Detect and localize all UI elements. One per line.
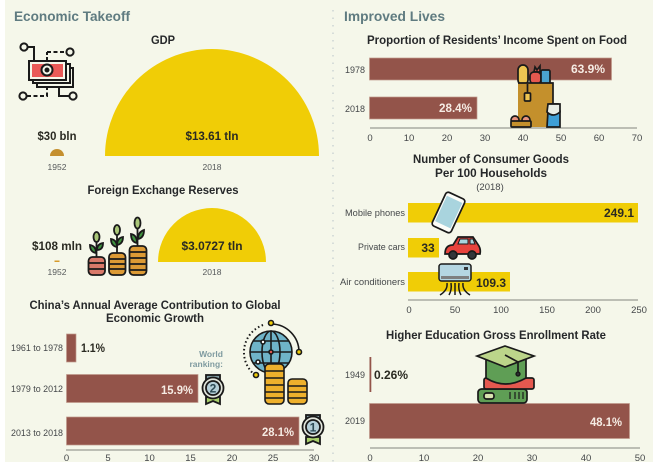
bar: 2013 to 2018 [66,417,299,445]
axis [64,450,319,462]
icon: coin stacks with plants [88,218,146,275]
value: 1.1%: 1.1% [81,343,105,355]
icon: medal 2: 2 [210,382,217,396]
axis: 10 [404,133,414,144]
axis: 50 [450,305,460,316]
bar: 1979 to 2012 [66,374,198,402]
semicircle: GDP 1952 [50,149,64,156]
year: 1952: 1952 [48,267,67,277]
label: 2018: 2018 [345,104,365,114]
subtitle: (2018): (2018) [476,182,504,193]
axis: 100 [493,305,509,316]
chart: consumer goods [340,154,647,316]
chart title: China's Annual Average Contribution [30,300,280,325]
icon: smartphone [431,191,466,234]
chart title: GDP: GDP [151,35,175,47]
year: 2018: 2018 [203,267,222,277]
icon: air conditioner [439,264,471,295]
text: World ranking [189,349,223,369]
icon: globe and coins [244,320,307,404]
value: $30 bln: $30 bln [38,129,76,143]
value: 0.26%: 0.26% [374,370,408,382]
panel: improved lives [340,8,647,462]
chart: GDP [38,35,319,172]
icon: medal 2 [202,375,224,404]
chart title: Number of Consumer Goods Per 100 Households: Number of Consumer Goods [413,154,569,166]
icon: graduation cap on books [477,346,534,403]
semicircle: reserves 1952 [54,260,60,262]
axis: 0 [367,133,373,144]
value: 33: 33 [421,241,435,255]
value: 48.1%: 48.1% [590,417,622,429]
bar: 1978 [370,58,612,80]
label: air conditioners: Air conditioners [340,277,406,287]
value: 28.1%: 28.1% [262,427,294,439]
chart title: Foreign Exchange Reserves: Foreign Exchange Reserves [88,185,238,197]
value: 15.9%: 15.9% [161,385,193,397]
bar: 2019 [370,404,630,438]
label: 1978: 1978 [345,65,365,75]
axis: 60 [594,133,604,144]
axis: 150 [539,305,555,316]
year: 2018: 2018 [203,162,222,172]
semicircle: GDP 2018 [105,49,319,156]
label: 2013 to 2018: 2013 to 2018 [11,428,63,438]
value: 63.9%: 63.9% [571,64,605,76]
label: mobile phones: Mobile phones [345,208,406,218]
chart title: Number of Consumer Goods Per 100 Households [413,154,569,180]
axis: 200 [585,305,601,316]
axis [367,128,642,144]
value: $13.61 tln: $13.61 tln [186,129,238,143]
chart title: Higher Education Gross Enrollment Rate: Higher Education Gross Enrollment Rate [386,330,606,342]
chart title: Proportion of Residents' Income Spent on Food: Proportion of Residents’ Income Spent on Food [367,35,627,47]
label: 1949: 1949 [345,370,365,380]
label: 1961 to 1978: 1961 to 1978 [11,343,63,353]
axis: 20 [442,133,452,144]
chart: contribution to global growth [11,300,319,462]
chart: income spent on food [345,35,642,144]
semicircle: reserves 2018 [158,208,266,262]
year: 1952: 1952 [48,162,67,172]
panel: economic takeoff [11,8,324,462]
icon: grocery bag [511,65,560,127]
axis: 30 [480,133,490,144]
label: 1979 to 2012: 1979 to 2012 [11,384,63,394]
icon: medal 1 [302,415,324,444]
value: 109.3: 109.3 [476,276,506,290]
icon: medal 1: 1 [310,420,317,434]
axis: 250 [631,305,647,316]
heading: Improved Lives: Improved Lives [344,8,445,24]
text: World ranking: World [199,349,223,359]
bar: 1961 to 1978 [66,334,76,362]
chart title: China's Annual Average Contribution: Economic Growth [106,313,204,325]
chart title: China's Annual Average Contribution: China’s Annual Average Contribution to Global [30,300,280,312]
text: World ranking: ranking: [189,359,223,369]
axis: 70 [632,133,642,144]
value: 28.4%: 28.4% [439,103,472,115]
label: private cars: Private cars [358,242,405,252]
value: $3.0727 tln: $3.0727 tln [182,239,242,253]
icon: red car [445,237,480,259]
chart: foreign exchange reserves [32,185,266,277]
value: $108 mln: $108 mln [32,239,82,253]
value: 249.1: 249.1 [604,206,634,220]
axis [367,448,645,462]
chart title: Number of Consumer Goods Per 100 Households: Per 100 Households [435,168,547,180]
axis [406,300,647,316]
bar: air conditioners [408,272,510,292]
label: 2019: 2019 [345,416,365,426]
bar: 1949 [370,357,371,392]
chart: higher education enrollment [345,330,645,462]
axis: 0 [406,305,412,316]
bar: private cars [408,238,439,258]
bar: 2018 [370,97,477,119]
heading: Economic Takeoff: Economic Takeoff [14,8,130,24]
bar: mobile phones [408,203,638,222]
axis: 50 [556,133,566,144]
axis: 40 [518,133,528,144]
icon: money circuit [19,43,77,100]
